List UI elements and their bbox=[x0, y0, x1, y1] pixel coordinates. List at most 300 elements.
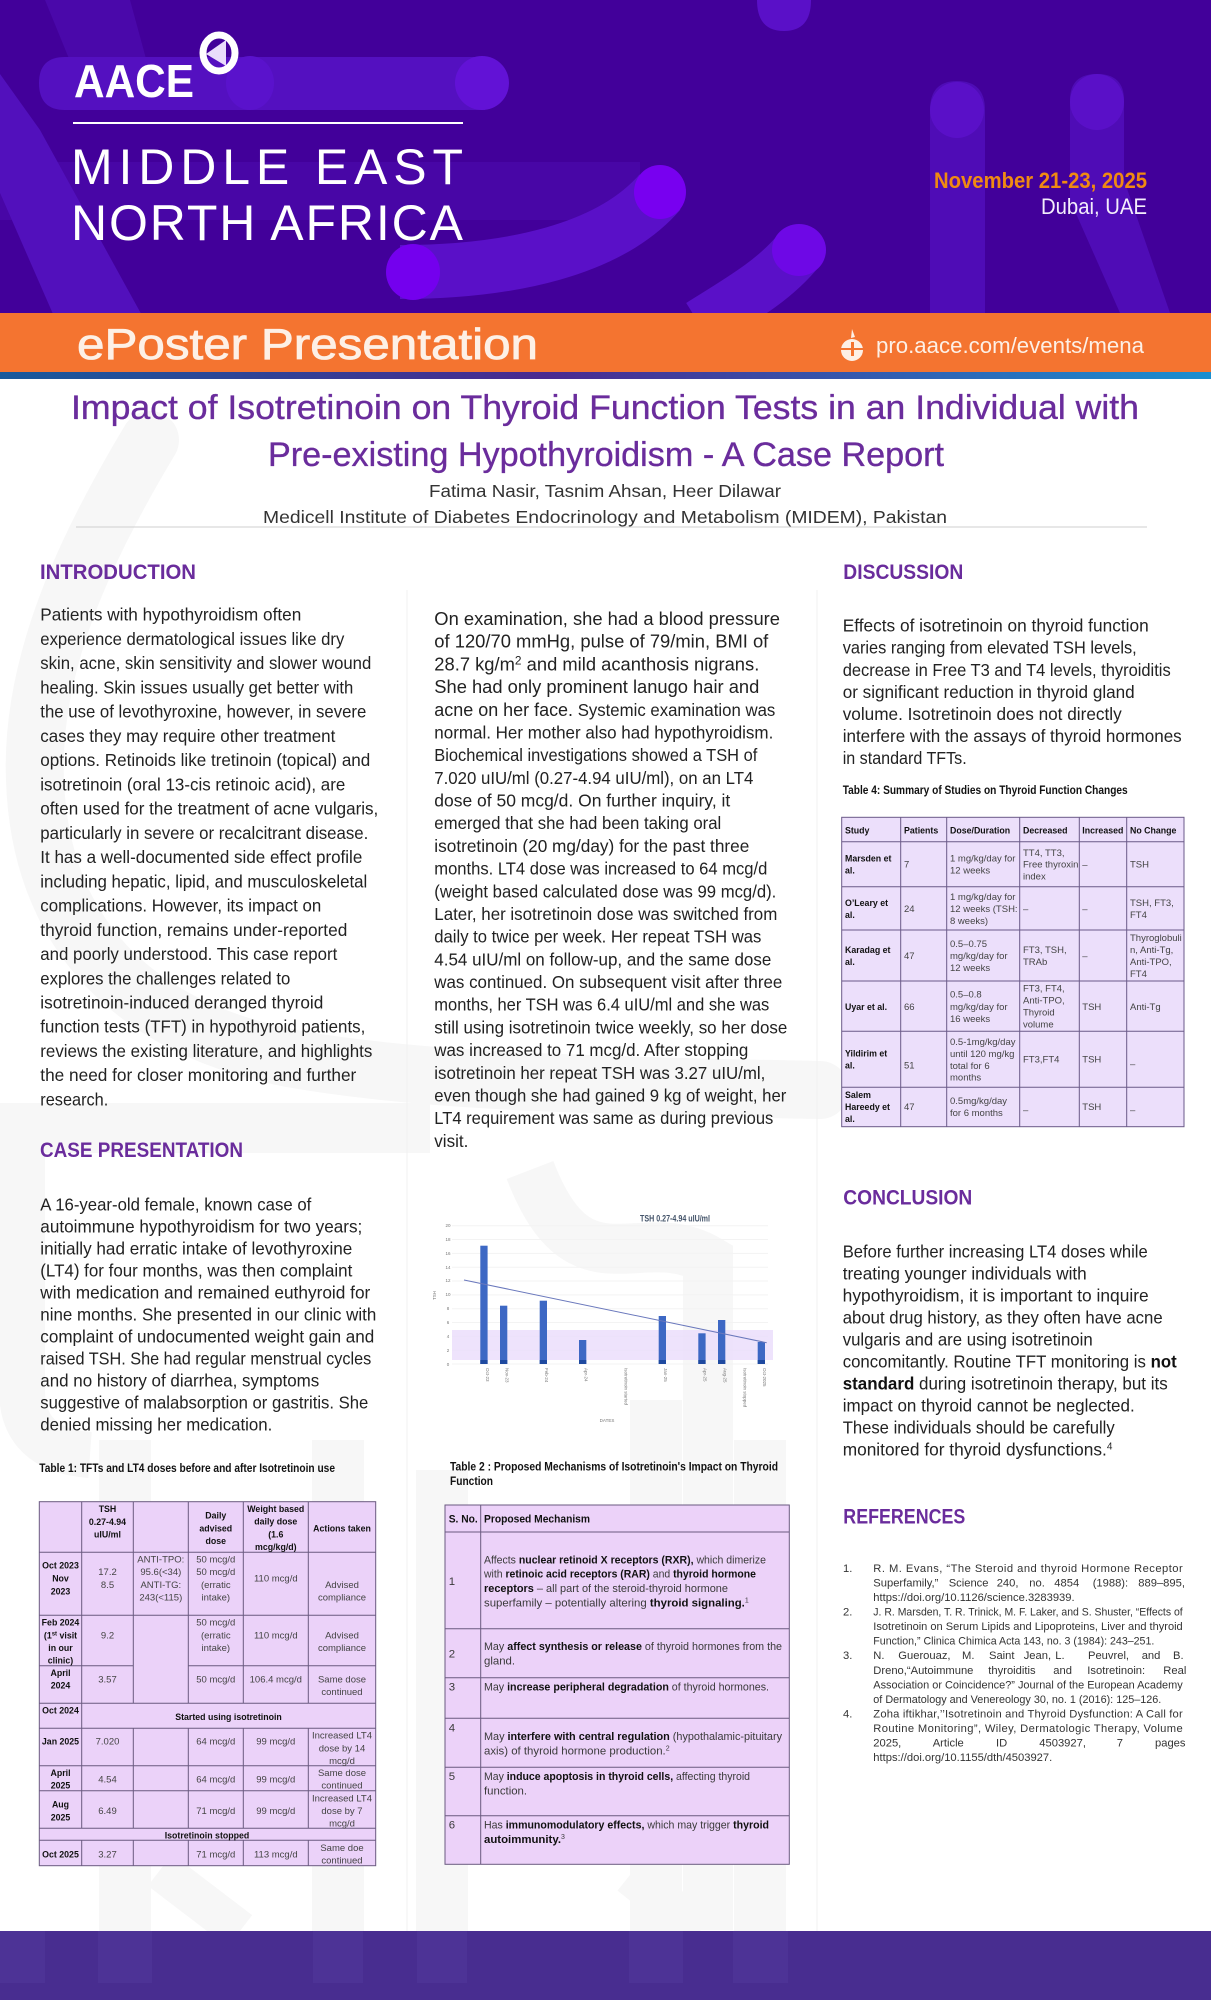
reference list: J. R. Marsden, T. R. Trinick, M. F. Laker, and S. Shuster, “Effects of bbox=[873, 1607, 1184, 1619]
text: case body: with medication and remained euthyroid for bbox=[39, 1283, 371, 1303]
x axis labels: Apr-24 bbox=[584, 1368, 588, 1382]
reference list: R. M. Evans, “The Steroid and thyroid Hormone Receptor bbox=[873, 1563, 1183, 1575]
bar chart: TSH over time: TSH 0.27-4.94 uIU/ml bbox=[640, 1214, 710, 1224]
table 1 data rows: mcg/d bbox=[329, 1819, 355, 1830]
bar chart: TSH over time: TSH bbox=[432, 1291, 437, 1300]
table 4 content: 1 mg/kg/day for bbox=[950, 854, 1015, 865]
table 2 content: 1 bbox=[745, 1597, 749, 1604]
text: introduction body: function tests (TFT) in hypothyroid patients, bbox=[40, 1017, 365, 1037]
table 2 content: gland. bbox=[484, 1655, 515, 1667]
table 4 content: Uyar et al. bbox=[845, 1002, 887, 1012]
table 1 data rows: Jan 2025 bbox=[42, 1737, 79, 1747]
table 2 content: 2 bbox=[666, 1745, 670, 1752]
table 4 content: mg/kg/day for bbox=[950, 951, 1008, 962]
reference list: Association or Coincidence?” Journal of the European Academy bbox=[873, 1679, 1183, 1691]
table 1 data rows: continued bbox=[321, 1781, 363, 1792]
reference list: 7 bbox=[1117, 1738, 1123, 1750]
text: conclusion body: standard during isotretinoin therapy, but its bbox=[843, 1373, 1168, 1393]
table 1 data rows: 243(<115) bbox=[139, 1593, 182, 1604]
table 4 content: Yildirim et bbox=[845, 1049, 887, 1059]
panel: discussion bbox=[843, 560, 1182, 768]
table 1 data rows: ANTI-TG: bbox=[140, 1580, 181, 1591]
table 1 data rows: 4.54 bbox=[98, 1774, 117, 1785]
panel: examination text bbox=[433, 608, 787, 1151]
table 4 content: FT3, FT4, bbox=[1023, 984, 1065, 995]
table 1 data rows: Same doe bbox=[320, 1843, 364, 1854]
table 1 data rows: dose by 7 bbox=[321, 1806, 363, 1817]
table 2 content: superfamily – potentially altering thyroid signaling. bbox=[484, 1597, 745, 1609]
text: case body: nine months. She presented in our clinic with bbox=[40, 1305, 376, 1325]
panel: examination text: isotretinoin (20 mg/day) for the past three bbox=[434, 836, 749, 856]
panel: examination text: was continued. On subsequent visit after three bbox=[433, 972, 782, 992]
panel: examination text: Later, her isotretinoin dose was switched from bbox=[434, 904, 777, 924]
table 1 header row: 0.27-4.94 bbox=[89, 1517, 126, 1527]
table 1 data rows: (1 bbox=[44, 1630, 52, 1640]
reference list: L. bbox=[1055, 1650, 1065, 1662]
panel: examination text: 2 bbox=[515, 653, 522, 667]
text: introduction body: healing. Skin issues usually get better with bbox=[40, 677, 353, 697]
table 1 data rows: 2023 bbox=[51, 1586, 70, 1596]
text: conclusion body: These individuals should be carefully bbox=[843, 1417, 1115, 1437]
reference list: 240, bbox=[997, 1578, 1018, 1590]
authors and affiliation: Fatima Nasir, Tasnim Ahsan, Heer Dilawar bbox=[429, 481, 781, 501]
conference name: MIDDLE EAST bbox=[71, 139, 463, 195]
reference list: (1988): bbox=[1093, 1578, 1128, 1590]
table 4 content: Hareedy et bbox=[845, 1102, 890, 1112]
icon: website globe bbox=[841, 329, 863, 361]
table 4 content: n, Anti-Tg, bbox=[1130, 945, 1173, 956]
table 2 content: with retinoic acid receptors (RAR) and thyroid hormone bbox=[483, 1569, 756, 1581]
reference list: ID bbox=[996, 1738, 1007, 1750]
poster title: Pre-existing Hypothyroidism - A Case Report bbox=[268, 436, 945, 474]
x axis labels bbox=[485, 1368, 767, 1408]
y axis labels: 2 bbox=[447, 1348, 450, 1353]
table 2 content: May increase peripheral degradation of thyroid hormones. bbox=[484, 1682, 769, 1694]
y axis labels: 8 bbox=[447, 1306, 450, 1311]
y axis labels: 0 bbox=[447, 1362, 450, 1367]
table 4 content: Study bbox=[845, 825, 870, 835]
text: discussion body: or significant reduction in thyroid gland bbox=[843, 682, 1135, 702]
heading: references: REFERENCES bbox=[843, 1504, 965, 1528]
table 4 content: volume bbox=[1023, 1020, 1054, 1031]
table 1 data rows: Increased LT4 bbox=[312, 1731, 372, 1742]
text: conclusion body: 4 bbox=[1107, 1441, 1113, 1452]
text: case body: raised TSH. She had regular menstrual cycles bbox=[40, 1349, 372, 1369]
panel: examination text: was increased to 71 mcg/d. After stopping bbox=[433, 1040, 748, 1060]
table 4 grid bbox=[842, 817, 1184, 1127]
text: discussion body bbox=[843, 616, 1182, 768]
table 1 data rows: continued bbox=[321, 1687, 363, 1698]
x axis labels: Feb-24 bbox=[544, 1368, 549, 1383]
text: introduction body: explores the challenges related to bbox=[40, 968, 290, 988]
panel: examination text: of 120/70 mmHg, pulse of 79/min, BMI of bbox=[434, 631, 769, 652]
x axis labels: Isotretinoin started bbox=[624, 1368, 628, 1406]
table 1 header row: dose bbox=[206, 1536, 226, 1546]
panel: examination text: still using isotretinoin twice weekly, so her dose bbox=[434, 1017, 787, 1037]
text: case body: (LT4) for four months, was then complaint bbox=[40, 1261, 352, 1281]
table 1 data rows: Advised bbox=[325, 1630, 359, 1641]
table 4 content: 51 bbox=[904, 1061, 915, 1072]
reference list: 1. bbox=[843, 1563, 852, 1575]
table 4 content: 12 weeks (TSH: bbox=[950, 904, 1018, 915]
table 1 data rows: clinic) bbox=[48, 1656, 73, 1666]
table 1 data rows: Oct 2023 bbox=[42, 1561, 79, 1571]
bar chart: TSH over time bbox=[432, 1214, 773, 1423]
footer band bbox=[0, 1931, 1211, 2000]
orange ePoster band bbox=[0, 313, 1211, 372]
poster title bbox=[71, 389, 1139, 474]
reference list: https://doi.org/10.1155/dth/4503927. bbox=[873, 1752, 1052, 1764]
orange ePoster band: pro.aace.com/events/mena bbox=[876, 333, 1145, 358]
panel: examination text: She had only prominent lanugo hair and bbox=[434, 676, 759, 697]
panel: examination text: On examination, she had a blood pressure bbox=[434, 608, 780, 629]
AACE logo bbox=[74, 35, 235, 107]
text: introduction body: It has a well-documented side effect profile bbox=[40, 847, 362, 867]
AACE logo: AACE bbox=[74, 55, 194, 107]
y axis labels bbox=[445, 1223, 451, 1367]
table 1 data rows: 17.2 bbox=[98, 1567, 117, 1578]
table 1 data rows: Same dose bbox=[318, 1674, 366, 1685]
caption: table 2: Function bbox=[450, 1476, 493, 1488]
text: introduction body bbox=[40, 605, 378, 1109]
table 4 content: 0.5–0.8 bbox=[950, 990, 982, 1001]
table 2 content: autoimmunity. bbox=[484, 1834, 561, 1846]
panel: references bbox=[843, 1504, 1186, 1764]
panel: examination text: even though she had gained 9 kg of weight, her bbox=[434, 1086, 787, 1106]
x axis labels: Oct-23 bbox=[485, 1368, 490, 1382]
table 1 data rows: 110 mcg/d bbox=[254, 1573, 298, 1584]
table 4 content: total for 6 bbox=[950, 1061, 990, 1072]
divider line bbox=[73, 122, 463, 124]
reference list: 3. bbox=[843, 1650, 852, 1662]
heading: introduction: INTRODUCTION bbox=[40, 560, 196, 584]
panel: examination text: LT4 requirement was same as during previous bbox=[434, 1108, 774, 1128]
text: conclusion body: hypothyroidism, it is important to inquire bbox=[843, 1285, 1149, 1305]
conference name bbox=[71, 139, 464, 251]
table 2 content: May affect synthesis or release of thyroid hormones from the bbox=[484, 1641, 782, 1653]
table 1 data rows: Oct 2025 bbox=[42, 1849, 79, 1859]
table 1 data rows: 9.2 bbox=[101, 1630, 114, 1641]
table 4 content: Marsden et bbox=[845, 854, 892, 864]
table 1 data rows: 64 mcg/d bbox=[196, 1774, 235, 1785]
table 1 data rows: dose by 14 bbox=[319, 1743, 365, 1754]
x axis labels: Apr-25 bbox=[702, 1368, 708, 1382]
text: case body: A 16-year-old female, known case of bbox=[40, 1195, 311, 1215]
text: introduction body: thyroid function, remains under-reported bbox=[40, 920, 347, 940]
table 4 content: Salem bbox=[845, 1090, 871, 1100]
panel: examination text: 28.7 kg/m bbox=[434, 653, 516, 674]
table 4 content: al. bbox=[845, 1061, 855, 1071]
table 2 content: 2 bbox=[449, 1648, 455, 1660]
table 4 content: 12 weeks bbox=[950, 963, 990, 974]
text: introduction body: including hepatic, lipid, and musculoskeletal bbox=[40, 871, 367, 891]
table 1 data rows: 71 mcg/d bbox=[196, 1849, 235, 1860]
reference list: Jean, bbox=[1024, 1650, 1051, 1662]
table 2 content: 1 bbox=[449, 1576, 455, 1588]
table 1 data rows: 3.57 bbox=[98, 1674, 117, 1685]
table 2 content: 4 bbox=[449, 1723, 455, 1735]
table 4 content: – bbox=[1130, 1059, 1136, 1070]
table 4 content: TSH, FT3, bbox=[1130, 898, 1174, 909]
text: discussion body: volume. Isotretinoin does not directly bbox=[843, 704, 1122, 724]
table 2 content: Has immunomodulatory effects, which may trigger thyroid bbox=[484, 1820, 769, 1832]
table 1 data rows: April bbox=[50, 1668, 71, 1678]
table 1 data rows: Feb 2024 bbox=[42, 1617, 79, 1627]
text: conclusion body: vulgaris and are using isotretinoin bbox=[843, 1329, 1093, 1349]
text: conclusion body bbox=[843, 1241, 1177, 1459]
table 4 content: – bbox=[1130, 1105, 1136, 1116]
table 4 content: 12 weeks bbox=[950, 866, 990, 877]
table 4 content: Thyroglobuli bbox=[1130, 933, 1182, 944]
text: introduction body: often used for the treatment of acne vulgaris, bbox=[40, 799, 378, 819]
table 4 content: FT4 bbox=[1130, 910, 1147, 921]
table 4 content: 24 bbox=[904, 904, 915, 915]
text: case body bbox=[39, 1195, 376, 1435]
background watermark bbox=[0, 440, 820, 1931]
reference list: Dreno,“Autoimmune bbox=[873, 1665, 973, 1677]
table 4 content: 66 bbox=[904, 1002, 915, 1013]
reference list: Science bbox=[949, 1578, 989, 1590]
table 4 content: TSH bbox=[1082, 1055, 1101, 1066]
table 4 content: Karadag et bbox=[845, 945, 891, 955]
table 4 content: until 120 mg/kg bbox=[950, 1049, 1014, 1060]
panel: examination text: Biochemical investigations showed a TSH of bbox=[434, 745, 757, 765]
table 1 data rows: intake) bbox=[202, 1643, 230, 1654]
table 4 content: – bbox=[1082, 860, 1088, 871]
bars bbox=[480, 1246, 765, 1364]
table 1 data rows: (erratic bbox=[201, 1580, 231, 1591]
reference list: Guerouaz, bbox=[898, 1650, 951, 1662]
table 1 data rows: 110 mcg/d bbox=[254, 1630, 298, 1641]
trend line bbox=[464, 1280, 767, 1343]
table 2 content: May induce apoptosis in thyroid cells, affecting thyroid bbox=[484, 1771, 750, 1783]
table 1 data rows: 6.49 bbox=[98, 1806, 117, 1817]
table 2 content: 3 bbox=[449, 1682, 455, 1694]
table 4 content: Decreased bbox=[1023, 825, 1068, 835]
table 1 data rows: 71 mcg/d bbox=[196, 1806, 235, 1817]
text: introduction body: isotretinoin-induced deranged thyroid bbox=[40, 992, 323, 1012]
reference list: 2025, bbox=[873, 1738, 901, 1750]
table 4 content: – bbox=[1082, 904, 1088, 915]
table 1 data rows: visit bbox=[57, 1630, 77, 1640]
table 1 header row bbox=[89, 1504, 371, 1552]
y axis labels: 20 bbox=[445, 1223, 451, 1228]
authors and affiliation: Medicell Institute of Diabetes Endocrinology and Metabolism (MIDEM), Pakistan bbox=[263, 507, 947, 527]
table 1 data rows: compliance bbox=[318, 1593, 366, 1604]
text: introduction body: reviews the existing literature, and highlights bbox=[40, 1041, 373, 1061]
table 4 content: Anti-Tg bbox=[1130, 1002, 1161, 1013]
text: introduction body: and poorly understood. This case report bbox=[40, 944, 337, 964]
text: introduction body: particularly in severe or recalcitrant disease. bbox=[40, 823, 368, 843]
table 1 data rows: 95.6(<34) bbox=[140, 1567, 181, 1578]
table 1 data rows: Nov bbox=[52, 1573, 69, 1583]
date and place: Dubai, UAE bbox=[1041, 194, 1147, 219]
table 1 data rows: 2025 bbox=[51, 1781, 70, 1791]
panel: table 1 bbox=[39, 1463, 376, 1867]
text: conclusion body: concomitantly. Routine TFT monitoring is not bbox=[843, 1351, 1177, 1371]
table 4 content: 0.5mg/kg/day bbox=[950, 1096, 1007, 1107]
y axis labels: 18 bbox=[445, 1237, 451, 1242]
table 1 data rows: April bbox=[50, 1768, 71, 1778]
table 2 content: function. bbox=[484, 1785, 527, 1797]
text: discussion body: Effects of isotretinoin on thyroid function bbox=[843, 616, 1149, 636]
header banner bbox=[0, 0, 1211, 330]
table 1 header row: uIU/ml bbox=[94, 1530, 121, 1540]
table 2 content: 3 bbox=[561, 1834, 565, 1841]
table 2 content: 5 bbox=[449, 1771, 455, 1783]
table 1 data rows: 99 mcg/d bbox=[256, 1806, 295, 1817]
text: conclusion body: impact on thyroid cannot be neglected. bbox=[843, 1395, 1135, 1415]
text: case body: autoimmune hypothyroidism for two years; bbox=[40, 1217, 362, 1237]
table 4 content: TSH bbox=[1082, 1002, 1101, 1013]
table 2 content: receptors – all part of the steroid-thyroid hormone bbox=[484, 1583, 728, 1595]
text: introduction body: research. bbox=[40, 1089, 108, 1109]
table 4 content: Anti-TPO, bbox=[1023, 996, 1065, 1007]
table 2 content: 6 bbox=[449, 1820, 455, 1832]
table 4 content: Dose/Duration bbox=[950, 825, 1010, 835]
reference list: 4503927, bbox=[1039, 1738, 1086, 1750]
text: introduction body: skin, acne, skin sensitivity and slower wound bbox=[40, 653, 371, 673]
text: conclusion body: about drug history, as they often have acne bbox=[843, 1307, 1163, 1327]
table 1 data rows: (erratic bbox=[201, 1630, 231, 1641]
table 1 data rows: Started using isotretinoin bbox=[175, 1712, 282, 1722]
table 4 content: FT3,FT4 bbox=[1023, 1055, 1059, 1066]
table 1 data rows: 99 mcg/d bbox=[256, 1737, 295, 1748]
table 1 data rows: 50 mcg/d bbox=[196, 1554, 235, 1565]
panel: examination text: 4.54 uIU/ml on follow-up, and the same dose bbox=[434, 949, 771, 969]
table 4 content: 1 mg/kg/day for bbox=[950, 892, 1015, 903]
table 4 content: al. bbox=[845, 957, 855, 967]
y axis labels: 6 bbox=[447, 1320, 450, 1325]
table 4 content: 47 bbox=[904, 1102, 915, 1113]
text: case body: and no history of diarrhea, symptoms bbox=[40, 1371, 320, 1391]
table 4 content: 0.5-1mg/kg/day bbox=[950, 1037, 1016, 1048]
y axis labels: 16 bbox=[445, 1251, 451, 1256]
text: discussion body: interfere with the assays of thyroid hormones bbox=[843, 726, 1182, 746]
text: introduction body: options. Retinoids like tretinoin (topical) and bbox=[40, 750, 370, 770]
reference list: M. bbox=[962, 1650, 974, 1662]
text: discussion body: decrease in Free T3 and T4 levels, thyroiditis bbox=[843, 660, 1171, 680]
table 1 data rows: in our bbox=[48, 1643, 73, 1653]
panel: examination text: isotretinoin her repeat TSH was 3.27 uIU/ml, bbox=[434, 1063, 765, 1083]
table 2 grid bbox=[445, 1505, 789, 1864]
table 1 data rows: compliance bbox=[318, 1643, 366, 1654]
table 1 data rows: 50 mcg/d bbox=[196, 1674, 235, 1685]
table 4 content: – bbox=[1023, 904, 1029, 915]
caption: table 4: Table 4: Summary of Studies on Thyroid Function Changes bbox=[843, 785, 1128, 797]
table 1 header row: Actions taken bbox=[313, 1523, 371, 1533]
table 4 content: Thyroid bbox=[1023, 1008, 1055, 1019]
panel: table 4 bbox=[842, 785, 1184, 1127]
reference list: Routine Monitoring”, Wiley, Dermatologic Therapy, Volume bbox=[873, 1723, 1183, 1735]
table 1 header row: advised bbox=[199, 1523, 232, 1533]
table 1 data rows: mcg/d bbox=[329, 1756, 355, 1767]
reference list: B. bbox=[1173, 1650, 1184, 1662]
heading: discussion: DISCUSSION bbox=[843, 560, 963, 584]
table 1 header row: daily dose bbox=[254, 1517, 297, 1527]
reference list: 2. bbox=[843, 1607, 852, 1619]
panel: examination text: acne on her face. Systemic examination was bbox=[434, 699, 776, 720]
table 1 data rows: Same dose bbox=[318, 1768, 366, 1779]
caption: table 1: Table 1: TFTs and LT4 doses before and after Isotretinoin use bbox=[39, 1463, 335, 1475]
x axis labels: Aug-25 bbox=[722, 1368, 728, 1383]
reference list: pages bbox=[1155, 1738, 1186, 1750]
bar chart: TSH over time: DATES bbox=[600, 1418, 614, 1423]
reference list: Isotretinoin on Serum Lipids and Lipoproteins, Liver and thyroid bbox=[873, 1621, 1183, 1633]
reference list: Peuvrel, bbox=[1088, 1650, 1129, 1662]
reference list: Function,” Clinica Chimica Acta 143, no. 3 (1984): 243–251. bbox=[873, 1636, 1154, 1648]
text: conclusion body: monitored for thyroid dysfunctions. bbox=[843, 1439, 1107, 1459]
orange ePoster band: ePoster Presentation bbox=[77, 320, 538, 369]
table 4 content: 7 bbox=[904, 860, 909, 871]
conference name: NORTH AFRICA bbox=[71, 195, 464, 251]
text: case body: suggestive of malabsorption or gastritis. She bbox=[40, 1393, 368, 1413]
reference list: of Dermatology and Venereology 30, no. 1 (2016): 125–126. bbox=[873, 1694, 1161, 1706]
table 1 data rows: Increased LT4 bbox=[312, 1793, 372, 1804]
reference list: 889–895, bbox=[1138, 1578, 1185, 1590]
y axis labels: 4 bbox=[447, 1334, 450, 1339]
reference list: and bbox=[1142, 1650, 1160, 1662]
panel: table 2 bbox=[445, 1462, 789, 1864]
table 2 content: axis) of thyroid hormone production. bbox=[484, 1745, 666, 1757]
table 2 content: May interfere with central regulation (hypothalamic-pituitary bbox=[484, 1731, 782, 1743]
date and place: November 21-23, 2025 bbox=[934, 168, 1147, 193]
reference list: 4. bbox=[843, 1708, 852, 1720]
panel: examination text: daily to twice per week. Her repeat TSH was bbox=[434, 927, 762, 947]
text: introduction body: the use of levothyroxine, however, in severe bbox=[40, 702, 366, 722]
table 4 content: – bbox=[1082, 951, 1088, 962]
table 4 content: al. bbox=[845, 1114, 855, 1124]
table 4 content: TT4, TT3, bbox=[1023, 848, 1065, 859]
table 4 content: Free thyroxin bbox=[1023, 860, 1078, 871]
date and place bbox=[934, 168, 1147, 219]
text: introduction body: cases they may require other treatment bbox=[40, 726, 335, 746]
table 4 content: O’Leary et bbox=[845, 898, 888, 908]
table 1 data rows: 2024 bbox=[51, 1681, 70, 1691]
panel: examination text: dose of 50 mcg/d. On further inquiry, it bbox=[434, 790, 730, 810]
table 1 data rows: 113 mcg/d bbox=[254, 1849, 298, 1860]
table 4 content: – bbox=[1023, 1105, 1029, 1116]
reference list: thyroiditis bbox=[988, 1665, 1036, 1677]
table 4 content: FT4 bbox=[1130, 969, 1147, 980]
table 1 data rows: 3.27 bbox=[98, 1849, 117, 1860]
table 4 content: al. bbox=[845, 910, 855, 920]
text: introduction body: complications. However, its impact on bbox=[40, 896, 321, 916]
table 4 content: for 6 months bbox=[950, 1108, 1003, 1119]
panel: examination text: emerged that she had been taking oral bbox=[434, 813, 721, 833]
table 1 data rows: 99 mcg/d bbox=[256, 1774, 295, 1785]
reference list: Article bbox=[933, 1738, 964, 1750]
y axis labels: 12 bbox=[445, 1278, 451, 1283]
table 2 content: S. No. bbox=[449, 1514, 478, 1526]
table 2 content: Affects nuclear retinoid X receptors (RXR), which dimerize bbox=[484, 1554, 766, 1566]
reference list: no. bbox=[1029, 1578, 1045, 1590]
heading: conclusion: CONCLUSION bbox=[843, 1186, 972, 1210]
table 4 content: al. bbox=[845, 865, 855, 875]
reference list: Saint bbox=[989, 1650, 1015, 1662]
reference list: and bbox=[1053, 1665, 1072, 1677]
text: discussion body: in standard TFTs. bbox=[843, 748, 967, 768]
reference range band bbox=[452, 1330, 773, 1360]
table 2 content bbox=[449, 1514, 782, 1846]
table 4 content: Anti-TPO, bbox=[1130, 957, 1172, 968]
reference list: Isotretinoin: bbox=[1087, 1665, 1145, 1677]
panel: examination text: (weight based calculated dose was 99 mcg/d). bbox=[434, 881, 776, 901]
text: conclusion body: treating younger individuals with bbox=[843, 1263, 1087, 1283]
text: introduction body: Patients with hypothyroidism often bbox=[40, 605, 301, 625]
caption: table 2 bbox=[450, 1462, 778, 1488]
table 1 header row: Weight based bbox=[247, 1504, 304, 1514]
